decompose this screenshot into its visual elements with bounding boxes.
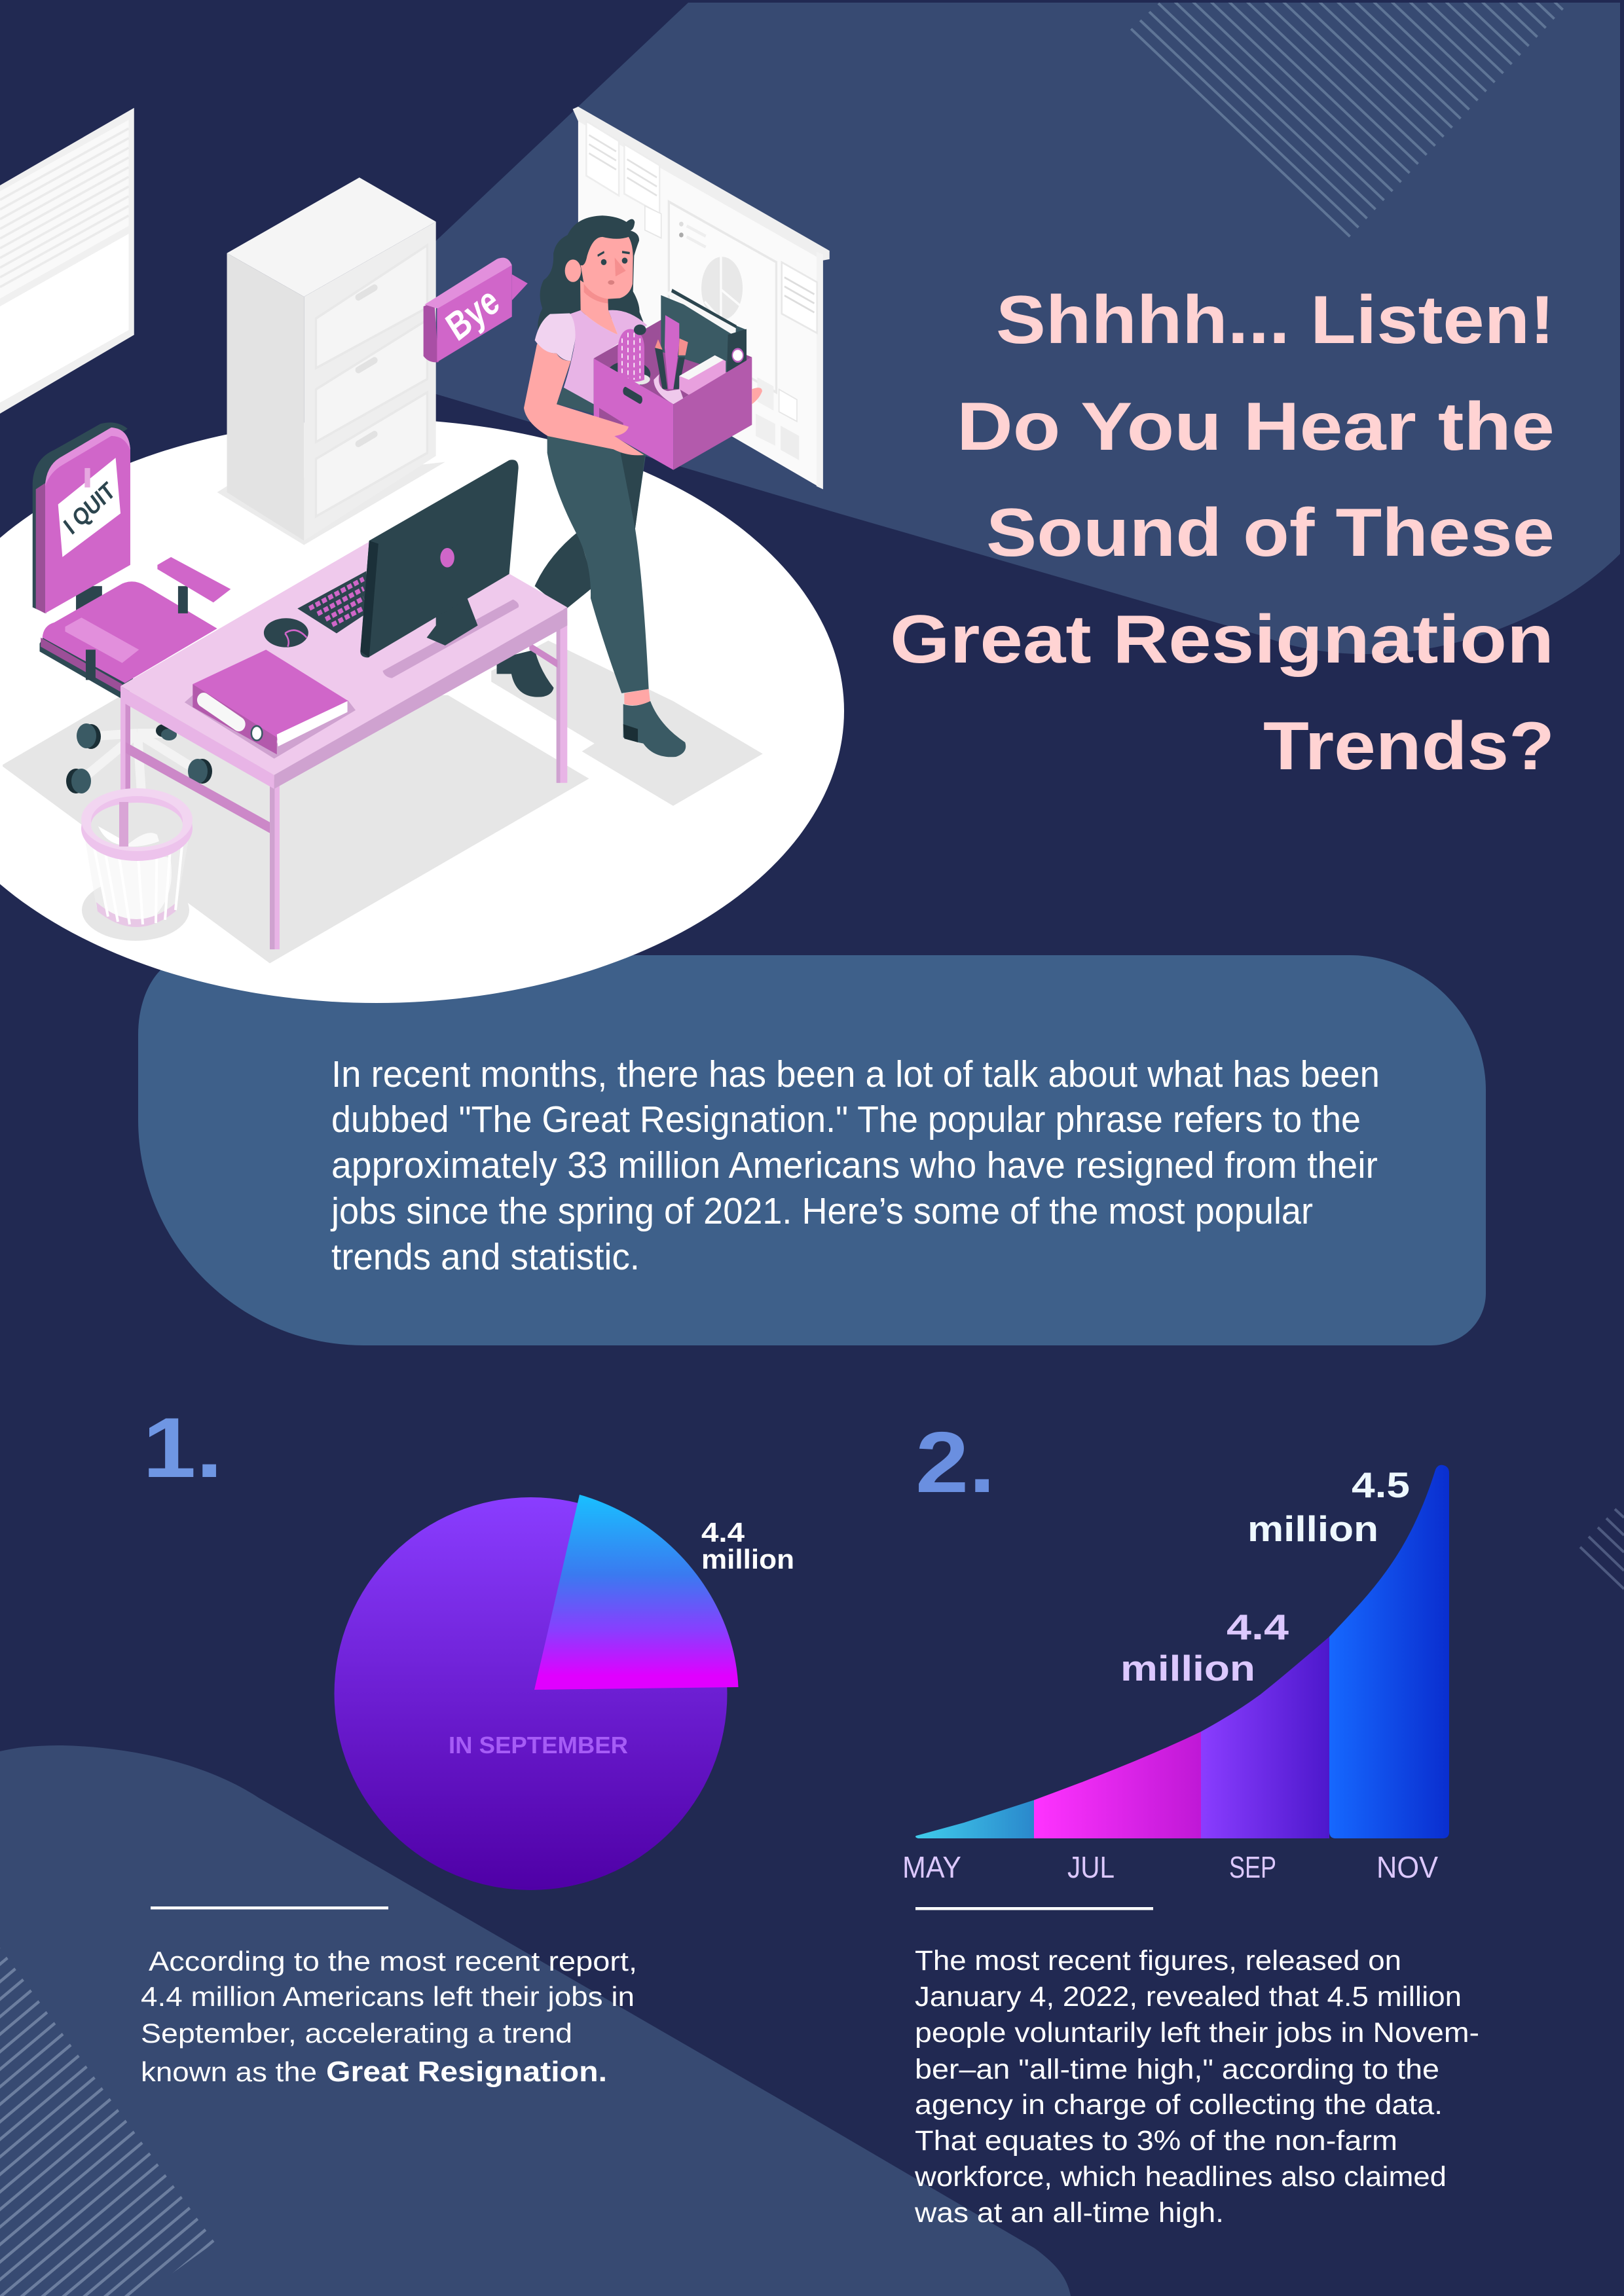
intro text: jobs since the spring of 2021. Here’s some of the most popular: [330, 1190, 1313, 1232]
white floor ellipse: [0, 419, 844, 1003]
area chart: [915, 1465, 1449, 1838]
title: [890, 282, 1555, 784]
paragraph 2: workforce, which headlines also claimed: [914, 2161, 1447, 2193]
ear: [565, 259, 581, 282]
window with blinds: [0, 108, 134, 414]
divider right: [915, 1907, 1153, 1910]
pie chart: [334, 1495, 739, 1890]
divider left: [151, 1906, 388, 1909]
paragraph 1: September, accelerating a trend: [141, 2018, 572, 2049]
speech bubble: Bye: [424, 258, 528, 362]
paragraph 2: was at an all-time high.: [914, 2197, 1224, 2229]
title: Shhhh... Listen!: [996, 282, 1555, 358]
cactus: [607, 325, 650, 388]
top background blob: [393, 3, 1620, 654]
band May: [915, 1800, 1034, 1838]
chart month axis: JUL: [1067, 1850, 1115, 1884]
speech bubble: Bye: Bye: [439, 279, 506, 350]
filing cabinet: [217, 177, 445, 545]
intro text: In recent months, there has been a lot of talk about what has been: [331, 1053, 1380, 1095]
binder on desk: [185, 649, 356, 759]
intro text: trends and statistic.: [331, 1236, 640, 1278]
pie value label: million: [701, 1544, 794, 1575]
I QUIT note: [58, 458, 120, 557]
paragraph 1: known as the: [141, 2056, 317, 2087]
binder in box: [661, 289, 747, 373]
desk legs: [120, 619, 567, 949]
paragraph 2: January 4, 2022, revealed that 4.5 million: [915, 1981, 1462, 2013]
paragraph 2: That equates to 3% of the non-farm: [915, 2125, 1397, 2157]
section number 1: 1.: [143, 1400, 223, 1495]
shirt: [563, 310, 647, 405]
paragraph 2: ber–an "all-time high," according to the: [915, 2054, 1439, 2085]
office chair: [33, 422, 231, 698]
woman carrying a box: [497, 215, 762, 757]
intro text: [330, 1053, 1380, 1278]
monitor shadow: [382, 600, 519, 678]
chart label 4.4 million: 4.4: [1227, 1607, 1289, 1647]
desk: [120, 460, 567, 949]
box inner: [594, 319, 752, 404]
section number 2: 2.: [915, 1414, 995, 1510]
intro card: [138, 955, 1486, 1345]
upper body: [524, 215, 762, 470]
chart label 4.4 million: million: [1120, 1648, 1255, 1688]
intro text: dubbed "The Great Resignation." The popular phrase refers to the: [331, 1099, 1361, 1140]
pie wedge: [534, 1495, 739, 1690]
face: [581, 237, 633, 299]
floor rugs: [3, 640, 763, 963]
chart month axis: MAY: [902, 1850, 961, 1884]
box front: [594, 358, 673, 470]
band Sep: [1201, 1637, 1329, 1838]
bottom hatch pattern: [0, 1948, 215, 2296]
paragraph 1: According to the most recent report,: [149, 1946, 637, 1977]
intro text: approximately 33 million Americans who have resigned from their: [331, 1144, 1378, 1186]
paragraph 2: [914, 1945, 1479, 2229]
sleeve: [535, 313, 576, 361]
chart label 4.5 million: million: [1247, 1508, 1378, 1549]
paragraph 2: The most recent figures, released on: [915, 1945, 1401, 1977]
pie value label: 4.4: [701, 1517, 745, 1548]
chart label 4.5 million: 4.5: [1352, 1465, 1410, 1505]
title: Great Resignation: [890, 602, 1554, 678]
title: Trends?: [1263, 708, 1555, 784]
I QUIT note: I QUIT: [60, 477, 120, 540]
mouse: [264, 618, 308, 647]
chart label 4.5 million: [1247, 1465, 1410, 1549]
paragraph 1: [141, 1946, 637, 2088]
waistband: [557, 388, 594, 414]
chart month axis: SEP: [1229, 1850, 1276, 1884]
title: Sound of These: [986, 495, 1555, 571]
legs and shoes: [497, 436, 686, 757]
top hatch pattern: [1129, 3, 1572, 239]
neck: [580, 280, 618, 335]
paragraph 1: 4.4 million Americans left their jobs in: [141, 1981, 635, 2012]
paragraph 1: Great Resignation.: [326, 2056, 607, 2088]
chart label 4.4 million: [1120, 1607, 1289, 1688]
band Jul: [1034, 1732, 1201, 1838]
monitor: [360, 460, 519, 657]
paragraph 2: people voluntarily left their jobs in Novem-: [915, 2017, 1479, 2049]
office illustration: [0, 107, 844, 1003]
pens and mug: [654, 315, 726, 404]
hair: [538, 215, 644, 331]
pie value label: [701, 1517, 794, 1575]
right edge hatch: [1580, 1509, 1624, 1589]
pie center label: IN SEPTEMBER: [449, 1732, 628, 1758]
chair base and wheels: [66, 723, 212, 813]
presentation board: [573, 107, 830, 489]
keyboard: [297, 571, 367, 633]
band Nov: [1329, 1465, 1449, 1838]
bottom background blob: [0, 1745, 1071, 2296]
chart month axis: NOV: [1376, 1850, 1438, 1884]
chart month axis: [902, 1850, 1438, 1884]
title: Do You Hear the: [957, 389, 1555, 465]
arm: [524, 344, 644, 455]
paragraph 2: agency in charge of collecting the data.: [915, 2089, 1443, 2121]
waste basket: [81, 788, 193, 941]
